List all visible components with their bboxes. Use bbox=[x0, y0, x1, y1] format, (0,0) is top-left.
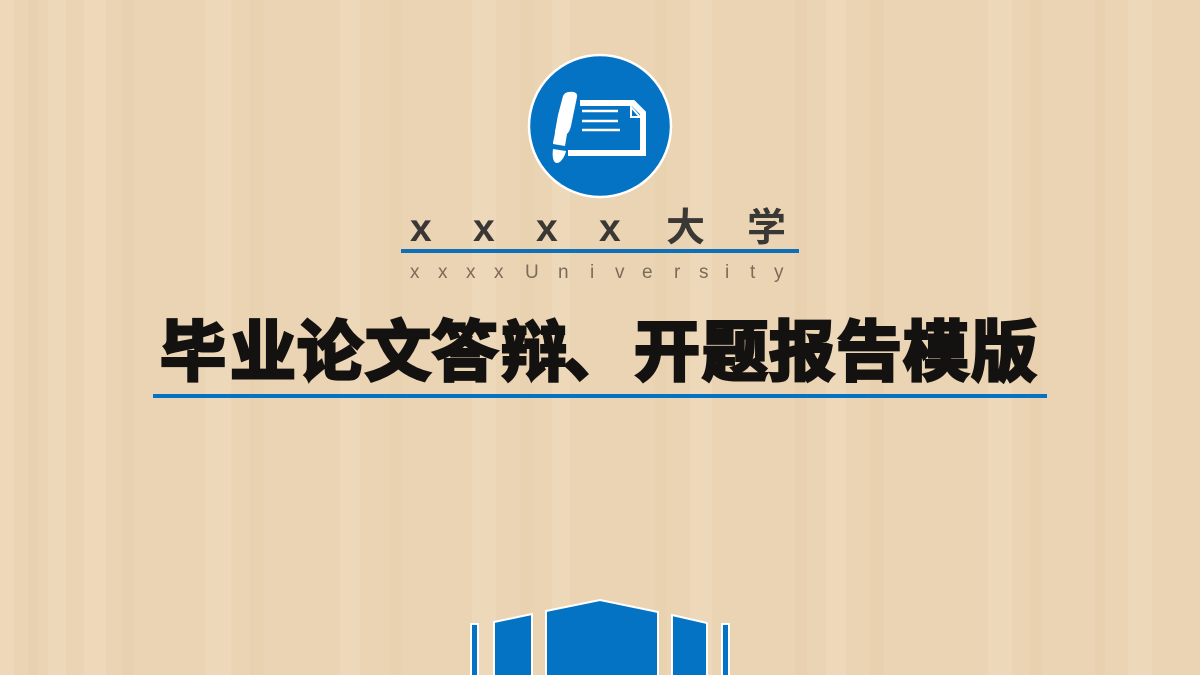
icon: document text lines bbox=[582, 111, 620, 130]
university name underline bbox=[401, 249, 799, 253]
column: far left bbox=[471, 624, 478, 675]
icon: building columns bbox=[471, 600, 729, 675]
tower: center bbox=[546, 600, 658, 675]
column: far right bbox=[722, 624, 729, 675]
university name: xxxx大学 bbox=[410, 207, 786, 250]
icon: pen and document badge bbox=[529, 55, 671, 197]
wing: right bbox=[672, 615, 707, 675]
wing: left bbox=[494, 614, 532, 675]
icon: fountain pen bbox=[553, 92, 577, 163]
university English name: xxxxUniversity bbox=[410, 262, 784, 283]
icon: document outline bbox=[568, 103, 643, 153]
main title: 毕业论文答辩、开题报告模版 bbox=[160, 315, 1037, 389]
main title underline bbox=[153, 394, 1047, 398]
